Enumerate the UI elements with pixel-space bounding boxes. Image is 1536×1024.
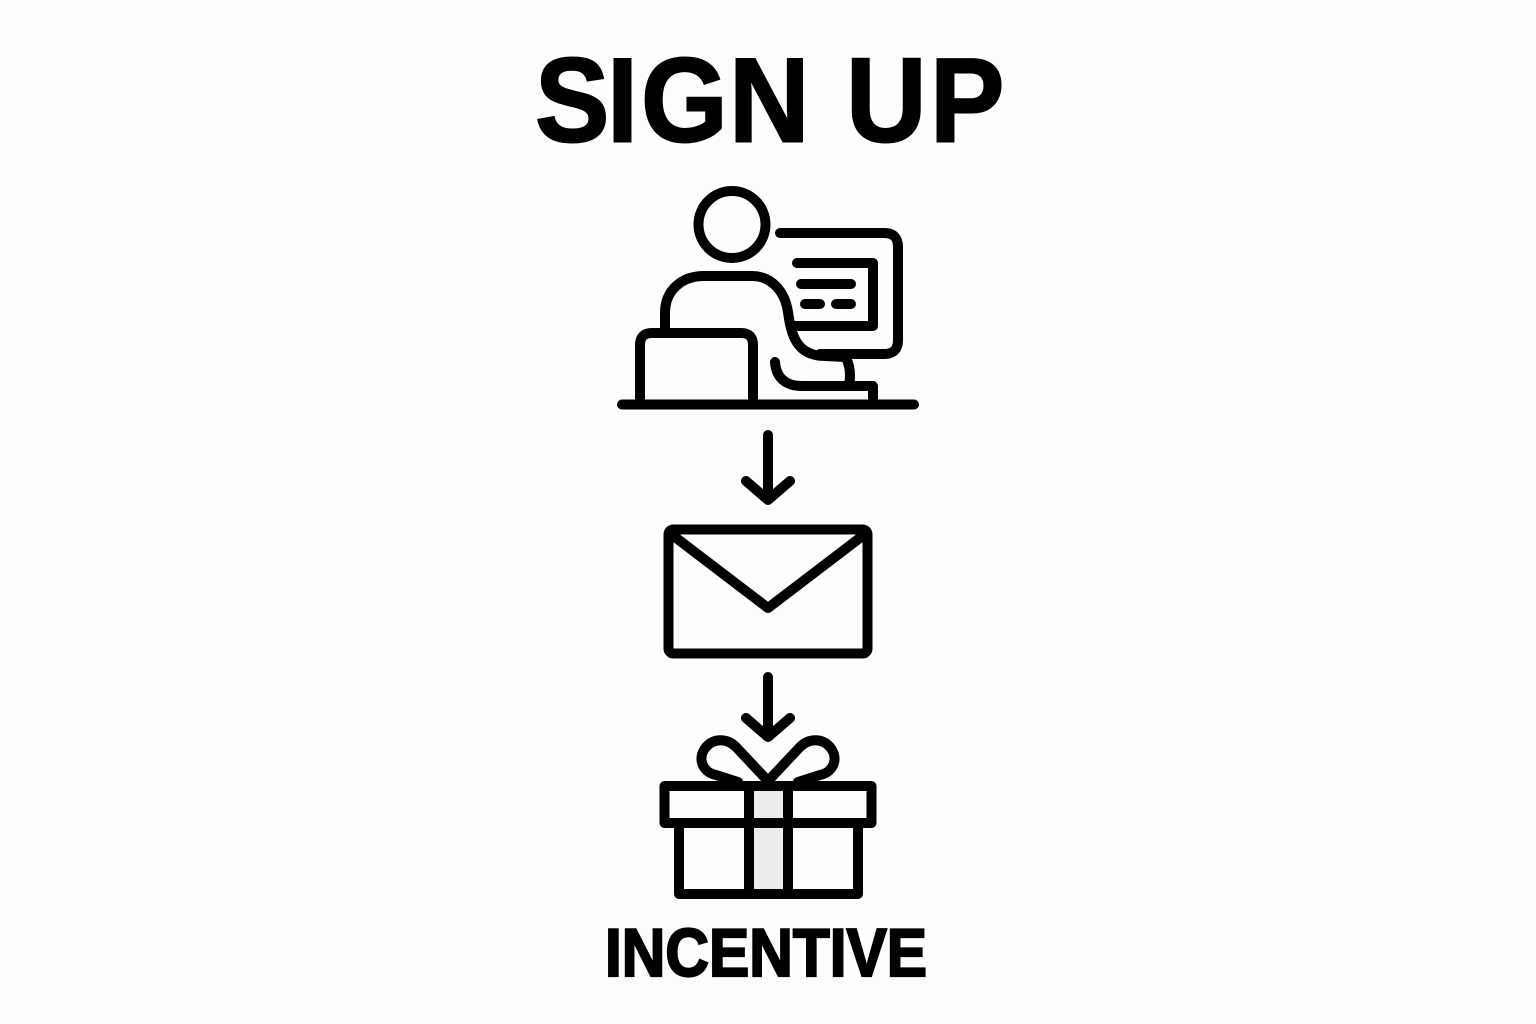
box body	[679, 823, 858, 894]
arrow: email to gift	[746, 677, 790, 737]
ribbon fill	[753, 790, 784, 890]
desk	[622, 400, 914, 410]
screen panel	[792, 263, 873, 326]
incentive label: INCENTIVE	[605, 915, 927, 991]
title: SIGN UP	[535, 33, 1004, 167]
lid	[664, 786, 872, 823]
person head	[698, 191, 766, 258]
arrow: signup to email	[746, 435, 790, 500]
vertical ribbon lines	[749, 786, 788, 894]
monitor stand and keyboard	[775, 358, 873, 403]
monitor outline	[780, 233, 898, 354]
icon: envelope	[668, 530, 868, 654]
icon: person at computer	[622, 191, 914, 404]
person body	[665, 276, 846, 357]
icon: gift box	[664, 740, 872, 894]
laptop	[640, 333, 753, 403]
bow	[701, 740, 835, 782]
